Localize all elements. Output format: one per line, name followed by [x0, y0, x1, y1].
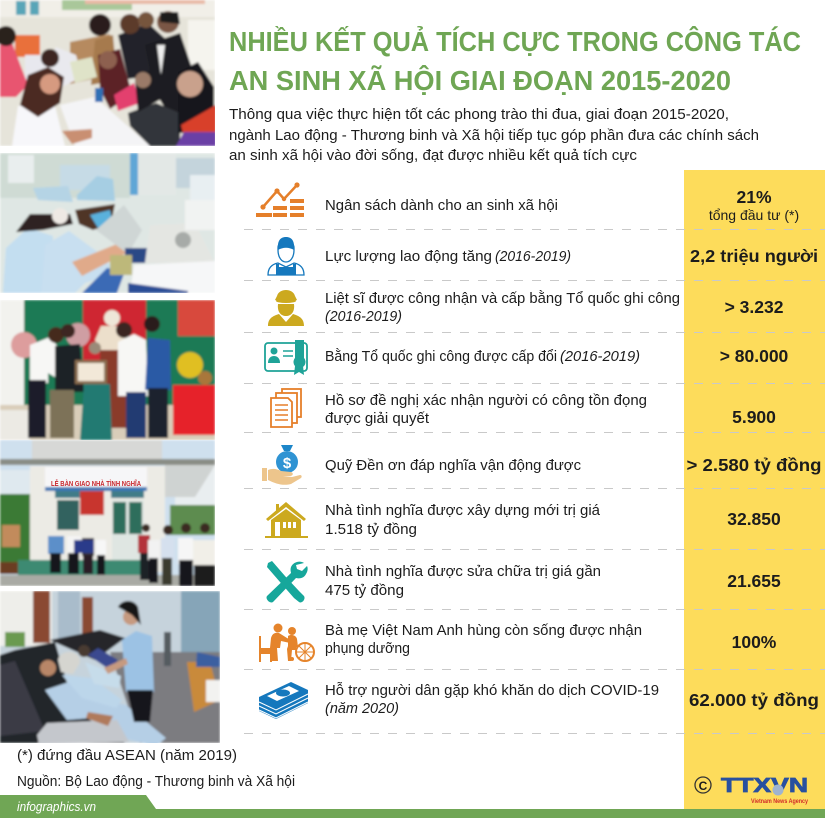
icon: caregiver and wheelchair — [259, 624, 314, 662]
row 7: new houses: 1.518 tỷ đồng — [325, 522, 417, 538]
banner text on house photo: LỄ BÀN GIAO NHÀ TÌNH NGHĨA — [51, 479, 141, 488]
icon: documents — [271, 389, 301, 427]
row 8: repaired houses: 21.655 — [727, 571, 781, 591]
row 4: certificates: Bằng Tổ quốc ghi công được cấp đổi — [325, 348, 557, 365]
row 10: covid support: (năm 2020) — [325, 701, 399, 717]
icon: banknote stack — [259, 682, 308, 719]
row 10: covid support: Hỗ trợ người dân gặp khó khăn do dịch COVID-19 — [325, 682, 659, 699]
intro text: ngành Lao động - Thương binh và Xã hội tiếp tục góp phần đưa các chính sách — [229, 128, 759, 144]
yellow value column — [684, 170, 825, 810]
row 9: heroic mothers: 100% — [732, 632, 777, 652]
row 2: workforce — [268, 237, 818, 275]
icon: money bag in hand: $ — [283, 455, 292, 472]
row 8: repaired houses: 475 tỷ đồng — [325, 583, 404, 599]
footnote: (*) đứng đầu ASEAN (năm 2019) — [17, 747, 237, 764]
row 6: fund — [262, 445, 822, 485]
row 2: workforce: Lực lượng lao động tăng — [325, 249, 492, 265]
row 3: martyrs: > 3.232 — [725, 297, 784, 317]
logo: TTXVN — [695, 775, 808, 805]
intro text: an sinh xã hội vào đời sống, đạt được nhiều kết quả tích cực — [229, 148, 637, 164]
photo: garment workers — [0, 153, 215, 293]
row 2: workforce: 2,2 triệu người — [690, 246, 818, 266]
row 1: budget: tổng đầu tư (*) — [709, 207, 799, 223]
logo: TTXVN: Vietnam News Agency — [751, 798, 808, 805]
row 3: martyrs: (2016-2019) — [325, 309, 402, 325]
footer bar — [0, 795, 825, 818]
icon: soldier — [268, 290, 304, 326]
row 10: covid support: 62.000 tỷ đồng — [689, 690, 819, 710]
row 5: dossiers: được giải quyết — [325, 411, 429, 427]
logo: TTXVN: C — [699, 779, 708, 793]
row 9: heroic mothers: phụng dưỡng — [325, 641, 410, 657]
footer bar: infographics.vn — [17, 800, 96, 814]
icon: house — [265, 502, 308, 538]
row 8: repaired houses: Nhà tình nghĩa được sửa chữa trị giá gần — [325, 564, 601, 580]
row 4: certificates: > 80.000 — [720, 346, 789, 366]
row 5: dossiers: Hồ sơ đề nghị xác nhận người có công tồn đọng — [325, 393, 647, 409]
intro text: Thông qua việc thực hiện tốt các phong trào thi đua, giai đoạn 2015-2020, — [229, 107, 729, 123]
row 6: fund: > 2.580 tỷ đồng — [686, 455, 822, 475]
icon: chart and coins — [256, 182, 304, 217]
icon: screwdriver and wrench — [267, 561, 308, 602]
row 1: budget — [256, 182, 799, 223]
row 10: covid support — [259, 682, 819, 719]
row 7: new houses: Nhà tình nghĩa được xây dựng mới trị giá — [325, 503, 601, 519]
icon: certificate — [265, 340, 307, 375]
row 3: martyrs — [268, 290, 784, 326]
title: AN SINH XÃ HỘI GIAI ĐOẠN 2015-2020 — [229, 64, 731, 96]
row 4: certificates: (2016-2019) — [560, 349, 640, 365]
title — [229, 25, 801, 96]
photo: massage chairs — [0, 591, 220, 746]
row 4: certificates — [265, 340, 789, 375]
source: Nguồn: Bộ Lao động - Thương binh và Xã hội — [17, 774, 295, 790]
row 7: new houses — [265, 502, 781, 538]
row 2: workforce: (2016-2019) — [495, 249, 571, 265]
logo: TTXVN: TTXVN — [721, 775, 808, 797]
intro text — [229, 107, 759, 164]
row 1: budget: 21% — [736, 187, 772, 207]
row 3: martyrs: Liệt sĩ được công nhận và cấp bằng Tổ quốc ghi công — [325, 290, 680, 307]
photo: medical check-up — [0, 0, 216, 146]
row 5: dossiers — [271, 389, 776, 427]
photo: house handover — [0, 440, 215, 586]
row 6: fund: Quỹ Đền ơn đáp nghĩa vận động được — [325, 458, 581, 474]
row 5: dossiers: 5.900 — [732, 407, 776, 427]
photo: award ceremony — [0, 300, 215, 440]
row 9: heroic mothers — [259, 623, 777, 662]
icon: money bag in hand — [262, 445, 302, 485]
row 9: heroic mothers: Bà mẹ Việt Nam Anh hùng còn sống được nhận — [325, 623, 642, 639]
row 8: repaired houses — [267, 561, 781, 602]
row 1: budget: Ngân sách dành cho an sinh xã hội — [325, 198, 558, 214]
row 7: new houses: 32.850 — [727, 509, 781, 529]
icon: worker — [268, 237, 304, 275]
